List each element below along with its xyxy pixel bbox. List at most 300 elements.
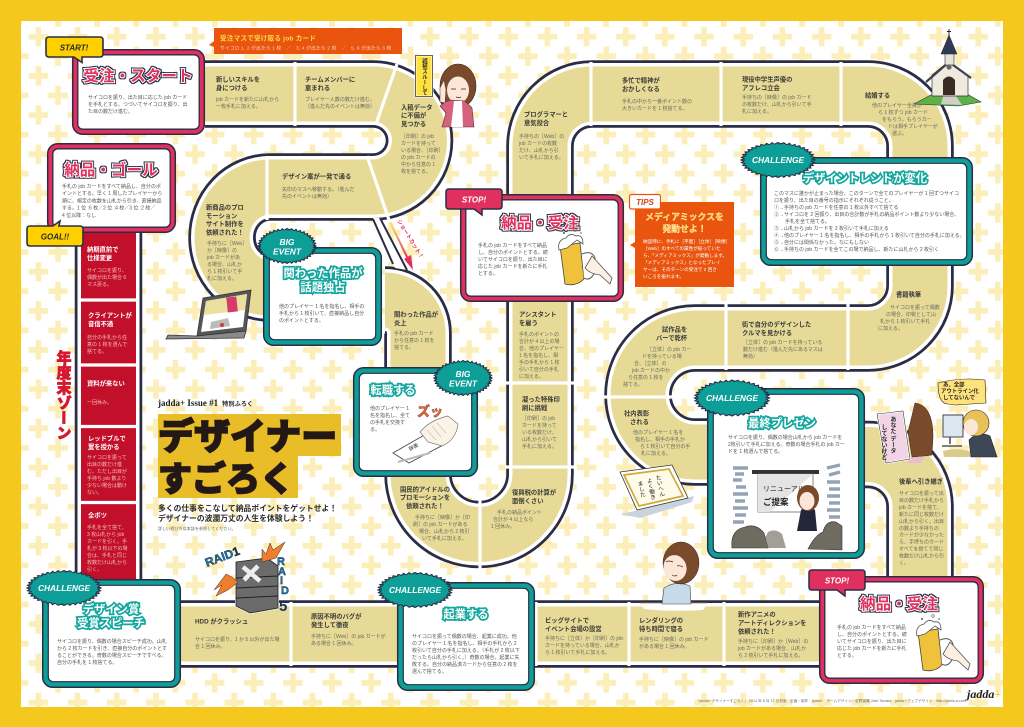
track cells: right row [623,290,944,566]
panel: job change: る。 [370,427,380,433]
panel: stop bottom: 手札の job カードをすべて納品 [837,625,906,631]
track cells: right row: 数だけ進む（進んだ先にあるマスは [743,346,823,353]
track cells: top row left: チームメンバーに [305,76,355,84]
track cells: top row left: 依頼された！ [206,227,244,236]
tips tag [630,194,660,209]
panel: start a business: 起業する [443,607,489,621]
track cells: middle column: 引いて自分の手札 [519,366,559,373]
title block [157,398,341,531]
panel: tips: メディアミックスを [645,212,724,222]
panel: design trend: ④→他のプレイヤー 1 名を指名し、相手の手札から 1 枚引いて自分の手札に加える。 [774,232,965,239]
red zone cells: 合は、手札と同じ [87,552,127,559]
track cells: right row: サイコロを振って出 [899,491,944,497]
panel: big event 1: 話題独占 [300,280,346,294]
red zone cells: 捨てる。 [87,348,107,355]
track cells: bottom row: 手持ちに［印刷］か［Web］の [738,639,808,645]
track cells: bottom row: サイコロを振り、1 か 5 以外が出た場 [195,637,280,643]
badge: challenge presentation: CHALLENGE [706,393,758,403]
track cells: right row: ら 1 枚引いて自分の手 [640,443,690,450]
panel: stop bottom: 応じた job カードを新たに手札 [837,645,906,652]
zone label: 年度末ゾーン [54,349,72,440]
track cells: middle column: 手の手札から 1 枚 [519,359,560,366]
badge: challenge trend [736,140,820,180]
track cells: top row left: モーション [206,212,237,220]
panel: design trend: ロを振り、出た目の番号の指示にそれぞれ従うこと。 [774,197,894,204]
track cells: bottom row: job カードがある場合、山札か [737,645,806,652]
track cells: bottom row [195,610,808,659]
track cells: bottom row: ら 1 枚引いて手札に加える。 [545,649,610,656]
panel: final presentation: 2枚引いて手札に加える。奇数の場合手札の job カー [728,441,845,448]
track cells: top row right: 現役中学生声優の [742,76,792,84]
track cells: top row left: 一枚手札に加える。 [216,103,261,110]
panel: tips: ヤーは、そのターンの受注で 2 回さ [643,266,717,273]
panel: start a business: サイコロを振って偶数の場合、起業に成功。他 [412,634,517,640]
track cells: bottom row: アートディレクションを [738,618,806,627]
panel: tips [630,202,734,287]
track cells: bottom row: 発生して徹夜 [311,620,349,629]
track cells: top row right: 他のプレイヤー全員か [872,103,922,109]
badge: big event 1: EVENT [273,246,302,256]
job card callout: サイコロ 1, 2 が出たら 1 枚 ／ 3, 4 が出たら 2 枚 ／ 5, 6 が出たら 3 枚 [220,44,392,52]
panel: start box: を手札とする。つづいてサイコロを振り、出 [88,101,188,108]
illustration: broken hard disk: RAID1 [203,544,242,570]
panel: stop center [461,195,623,301]
panel: goal box: 手札の job カードをすべて納品し、自分のポ [62,184,161,190]
illustration: resignation letter [393,404,458,463]
track cells: middle column: 合計が 4 以上の場 [519,338,560,345]
track cells: top row right [622,74,938,137]
track cells: right row: すべてを捨てて同じ [899,546,943,553]
track cells: bottom row: 手持ちに［Web］の job カードが [311,634,386,640]
panel: job change: 名を指名し、全て [370,412,410,419]
track cells: right row: 指名し、相手の手札か [635,436,685,443]
track cells: top row right: 結婚する [865,90,890,100]
track cells: middle column: 手持ちに［映像］か［印 [415,515,470,521]
panel: job change: 転職する [370,383,416,397]
panel: big event 1: 他のプレイヤー 1 名を指名し、相手の [279,304,364,310]
panel: goal box: する。1 位 :6 枚／2 位 :4 枚／3 位 :2 枚／ [62,205,155,212]
illustration: sleeping woman [640,542,707,611]
badge: challenge speech [22,568,106,608]
track cells: top row left: ら 1 枚引いて手 [207,268,242,275]
illustration: resignation letter: ズッ [417,404,443,419]
panel: final presentation [708,389,864,558]
board track [78,62,920,666]
panel: start a business: 敗する。自分の納品済カードから任意の 2 枚を [412,661,518,668]
track cells: middle column: 手札のポイントの [519,332,559,338]
red zone cells: 少ない場合は動け [87,482,127,489]
track cells: right row: job カードの中か [631,367,670,374]
track cells: middle column: 場合、山札から 2 枚引 [419,528,470,535]
shortcut arrow: ショートカット！ [395,218,425,260]
track cells: middle column: を雇う [519,318,538,327]
track cells: right row: ［立体］の job カードを持っている [743,340,822,346]
track cells: bottom row: 依頼された！ [738,626,776,636]
panel: start a business: 選んで捨てる。 [412,668,447,675]
illustration: beer mug [917,615,970,671]
stop tag bottom: STOP! [825,576,849,586]
panel: award speech [43,580,180,687]
track cells: right row: 枚数だけ山札から引 [899,553,944,560]
track cells: right row: 札から 1 枚引いて手札 [880,318,930,325]
track cells: bottom row: イベント会場の設営 [545,624,602,633]
track cells: right row: ［立体］の job カー [647,347,691,353]
job card callout [209,28,402,54]
track cells: right row: 山札から引く。出目 [899,518,944,525]
track cells: top row left: 札に加える。 [207,275,237,282]
panel: stop center: し、自分のポイントとする。続 [478,249,548,256]
track cells: right row: クルマを見かける [742,328,792,337]
track cells: middle column: だけ、山札から引 [519,147,559,154]
red zone cells: 自分の手札から任 [87,335,127,341]
track cells: top row left: 入稿データ [401,104,432,112]
badge: challenge business: CHALLENGE [389,585,441,595]
track cells: right row: ら、手持ちのカード [899,539,944,546]
red zone cells: 手札を全て捨て、 [87,525,127,531]
panel: design trend: このマスに誰かが止まった場合、このターンで全てのプレイヤーが 1 回ずつサイコ [774,191,959,197]
panel: big event 1: 手札から 1 枚引いて、直接納品し自分 [279,310,364,317]
badge: challenge trend: CHALLENGE [752,155,804,165]
panel: start box [73,50,204,134]
track cells: top row left: 身につける [216,83,247,92]
track cells: top row left: 新しいスキルを [216,76,260,84]
track cells: middle column: アシスタント [519,312,557,318]
panel: award speech: 受賞スピーチ [77,616,145,630]
track cells: top row right: 多忙で精神が [622,78,660,84]
track cells: right row: 目の数だけ手札から [899,497,944,504]
goal tag [27,221,83,246]
panel: start a business [398,583,534,690]
panel: tips: ら、「メディアミックス」が発動します。 [643,252,727,259]
panel: job change: 他のプレイヤー 1 [370,406,409,412]
illustration: beer mug [559,229,612,285]
track cells: middle column: 手札の納品ポイント [497,510,542,516]
track cells: right row: 捨てる。 [623,381,643,388]
red zone cells: 全ボツ [88,510,107,520]
illustration: woman with note: 誤植スルーして [421,58,428,96]
illustration: woman with note [416,56,476,127]
track cells: right row: job カードを捨て、 [898,504,942,511]
jadda logo: jadda+ [965,687,1001,701]
badge: challenge presentation [689,377,775,419]
track cells: top row left: いる場合、［印刷］ [401,147,444,154]
panel: final presentation: ドを 1 枚選んで捨てる。 [728,448,783,455]
badge: big event 2: EVENT [449,378,478,388]
track cells: middle column: いる枚数だけ、 [522,429,557,436]
panel: tips: いころを振れます。 [643,273,684,280]
track cells: middle column: 手札に加える。 [522,443,557,450]
track cells: middle column [394,110,568,542]
track cells: top row right: アフレコ立会 [742,83,780,92]
track cells: right row: 社内表彰 [624,410,649,418]
track cells: top row left: 新商品のプロ [206,204,244,212]
track cells: top row left: （進んだ先のイベントは無効） [305,103,375,110]
tips tag: TIPS [636,198,655,207]
panel: award speech: サイコロを振り、偶数の場合スピーチ成功。山札 [57,639,167,645]
red zone cells: 札が 3 枚以下の場 [87,545,128,552]
track cells: top row right: 大きいカードを 1 枚捨てる。 [622,105,688,112]
red zone cells: 枚数だけ山札から [87,559,127,566]
red zone cells: 音信不通 [88,319,114,328]
track cells: middle column: 関わった作品が [394,312,438,318]
track cells: top row left: か［映像］の [207,247,237,254]
panel: design trend: ⑤→自分には関係なかった。なにもしない [774,239,869,246]
red zone cells: 意の 1 枚を選んで [87,341,127,348]
track cells: middle column: 手持ちの［Web］の [519,134,564,140]
illustration: church [914,29,981,106]
panel: stop center: 納品・受注 [501,213,579,232]
illustration: coworkers with notes [877,379,997,463]
panel: award speech: ることができる。奇数の場合スピーチですべる。 [57,652,167,659]
panel: tips: ［Web］のすべての属性が揃っていた [643,245,721,252]
panel: tips: 納品時に、手札に［平面］［立体］［映像］ [643,239,730,244]
panel: start box: サイコロを振り、出た目に応じた job カード [88,95,187,101]
track cells: middle column: ［印刷］の job [522,416,555,422]
red zone cells: マス戻る。 [87,282,112,288]
stop tag center: STOP! [462,196,486,204]
track cells: middle column: 復興税の計算が [512,490,556,496]
track cells: bottom row: レンダリングの [639,618,683,624]
panel: tips: 発動せよ！ [662,223,707,234]
panel: stop bottom: し、自分のポイントとする。続 [837,631,907,638]
track cells: top row left [206,74,444,282]
track cells: bottom row: 原因不明のバグが [311,614,361,620]
track cells: middle column: 手札の job カード [394,331,433,337]
panel: stop bottom: 納品・受注 [860,594,938,613]
panel: stop bottom: いてサイコロを振り、出た目に [837,638,907,645]
track cells: top row left: に不備が [401,111,427,120]
track cells: right row: 後輩へ引き継ぎ [899,476,944,486]
start tag: START! [60,44,89,52]
track cells: top row left: プレイヤー人数の数だけ進む。 [305,97,375,103]
panel: design trend [761,158,972,265]
track cells: middle column: に加える。 [519,373,544,380]
track cells: top row right: ドは相手プレイヤーが [888,123,938,130]
track cells: right row: 合、［立体］の [634,360,667,367]
panel: design trend: デザイントレンドが変化 [803,171,928,185]
track cells: middle column: 捨てる。 [394,344,414,351]
track cells: top row left: ［印刷］の job [401,134,434,140]
track cells: top row left: 中から任意の 1 [401,161,435,168]
track cells: middle column: プログラマーと [524,112,568,118]
title block: jadda+ Issue #1 特別ふろく [157,398,253,408]
track cells: middle column: 合計が 4 以上なら [493,516,534,523]
red zone cells: カードを引く。手 [87,538,127,545]
track cells: middle column: 炎上 [394,318,407,327]
track cells: top row right: おかしくなる [622,84,660,93]
track cells: bottom row: 新作アニメの [738,612,776,618]
panel: stop bottom: とする。 [837,653,857,659]
track cells: top row left: サイト制作を [206,219,244,228]
panel: design trend: ⑥→手持ちの job カードを全てこの場で納品し、新たに山札から 2 枚引く [774,246,939,253]
panel: tips: 「メディアミックス」となったプレイ [643,259,720,266]
track cells: top row left: job カードを新たに山札から [216,97,279,103]
panel: final presentation: サイコロを振り、偶数の場合山札から job カードを [728,435,842,441]
track cells: bottom row: ビッグサイトで [545,618,589,624]
illustration: broken hard disk: RAID [277,556,289,597]
panel: stop center: いてサイコロを振り、出た目に [478,256,548,263]
panel: stop center: とする。 [478,271,498,277]
track cells: top row right: の枚数だけ、山札から引いて手 [742,101,812,108]
shortcut arrow [390,218,425,270]
red zone cells: 資料が来ない [87,378,125,388]
badge: big event 1 [254,226,320,266]
track cells: right row: ら任意の 1 枚を [628,374,664,381]
track cells: middle column: いて手札に加える。 [519,154,564,161]
track cells: right row: バーで乾杯 [656,333,688,342]
badge: challenge business [373,570,457,610]
track cells: top row left: job カードがあ [206,254,240,261]
illustration: certificate: たいへん [654,474,665,498]
track cells: bottom row: 待ち時間で寝る [639,624,683,633]
panel: design trend: 手札を全て捨てる。 [785,218,830,225]
red zone cells: 納期直前で [87,246,118,254]
panel: design trend: ③→山札から job カードを 2 枚引いて手札に加える [774,225,889,232]
track cells: middle column: 刷に挑戦 [522,403,548,412]
track cells: right row: 街で自分のデザインした [742,322,811,328]
panel: big event 1 [264,248,381,345]
track cells: right row: ドを持っている場 [642,353,682,360]
red zone cells: 翼を授かる [88,442,119,451]
track cells: middle column: 国民的アイドルの [400,486,450,494]
track cells: bottom row: 手持ちに［立体］か［印刷］の job [545,636,623,642]
track cells: middle column: job カードの枚数 [518,140,557,147]
panel: goal box: イントとする。早く 1 周したプレイヤーから [62,190,162,197]
title block: デザイナー [158,416,337,457]
panel: stop center: 応じた job カードを新たに手札 [478,263,547,270]
track cells: middle column: 合、他のプレイヤー [519,345,564,352]
red zone cells: サイコロを振り、 [87,268,127,274]
title block: デザイナーの波瀾万丈の人生を体験しよう！ [158,513,314,523]
panel: big event 1: 関わった作品が [283,268,363,280]
track cells: middle column: 刷］の job カードがある [413,521,467,528]
track cells: right row: 試作品を [662,326,687,334]
track cells: right row: に加える。 [878,325,903,332]
shortcut channel [373,218,407,270]
panel: goal box: 納品・ゴール [64,160,158,179]
red zone cells: む。ただし出目が [87,468,127,475]
track cells: top row left: 手持ちに［Web］ [207,241,247,247]
track cells: bottom row: HDD がクラッシュ [195,616,248,626]
track cells: right row: カードが少なかった [899,532,944,539]
badge: big event 2 [430,358,496,398]
panel: job change: の手札を交換す [370,419,405,426]
track cells: bottom row: 合 1 回休み。 [195,643,226,650]
panel: start a business: 枚引いて自分の手札に加える。（手札が 2 枚以下 [412,647,520,654]
illustration: presentation scene: リニューアル [763,485,805,493]
track cells: top row left: 矢印のマスへ移動する。（進んだ [282,187,355,193]
illustration: coworkers with notes: してないけど [880,424,887,460]
illustration: certificate [620,465,694,518]
red zone cells: 引く。 [87,566,102,573]
red zone cells: 3 枚山札から job [87,531,124,538]
panel: final presentation: 最終プレゼン [748,416,816,430]
red zone cells: レッドブルで [88,436,126,442]
track cells: right row: 書籍執筆 [896,290,922,298]
red zone cells: サイコロを振って [87,455,127,461]
track cells: right row: される [630,417,649,426]
start tag [46,37,103,62]
illustration: presentation scene [732,465,842,550]
track cells: middle column: 山札から引いて [522,436,557,443]
badge: big event 2: BIG [456,369,470,379]
panel: start box: た目の数だけ進む。 [88,108,133,115]
track cells: middle column: カードを持って [522,422,557,429]
track cells: bottom row: ある場合 1 回休み。 [311,640,357,647]
panel: award speech: から 2 枚カードを引き、直接自分のポイントとす [57,645,167,652]
track cells: right row: 札に加える。 [641,450,671,457]
track cells: right row: く。 [899,560,909,566]
red zone cells: 出目の数だけ進 [87,461,122,468]
red zone cells: 一回休み。 [87,399,112,406]
badge: challenge speech: CHALLENGE [38,583,90,593]
panel: award speech: 自分の手札を 1 枚捨てる。 [57,659,118,666]
track cells: middle column: から任意の 1 枚を [394,337,435,344]
track cells: top row right: 手札の中から一番ポイント数の [622,99,692,105]
track cells: middle column: 面倒くさい [512,496,543,505]
panel: goal box: 順に、規定の枚数を山札から引き、直接納品 [62,197,162,204]
track cells: right row: の場合、印税として山 [886,311,936,318]
track cells: top row right: をもらう。もらうカー [882,116,932,123]
illustration: coworkers with notes: アウトライン化 [941,387,979,395]
panel: award speech: デザイン賞 [83,604,139,616]
goal tag: GOAL!! [41,232,70,242]
stop tag center [446,189,502,215]
track cells: middle column: 1 回休み。 [491,523,515,530]
track cells: right row: サイコロを振って偶数 [890,305,940,311]
red zone cells: 偶数が出た場合 6 [87,274,126,281]
panel: start a business: のプレイヤー 1 名を指名し、相手の手札から 2 [412,640,517,647]
track cells: bottom row: がある場合 1 回休み。 [639,643,690,650]
track cells: bottom row: カードを持っている場合、山札か [545,642,620,649]
track cells: top row left: 恵まれる [305,83,330,92]
footer credits: 『jadda+ デザイナーすごろく』 2014 年 8 月 17 日初版 企画・制作：jadda+ チームデザイン：佐野香織 Joke Tanaka jadda+ ウェブデザイン http://jadda-a.com [696,698,966,703]
track cells: right row: 新たに同じ枚数だけ [899,511,944,518]
track cells: top row right: 手持ちの［映像］の job カード [742,95,811,101]
panel: job change [354,368,477,476]
panel: design trend: ②→サイコロを 2 回振り、出目の合計数が手札の納品ポイント数より少ない場合、 [774,211,959,218]
track cells: top row left: デザイン案が一発で通る [282,172,351,180]
illustration: coworkers with notes: してないんで [943,394,976,402]
stop tag bottom [809,570,865,596]
red zone cells: 仕様変更 [87,253,113,262]
track cells: middle column: 意気投合 [524,118,550,127]
red zone cells: クライアントが [88,312,132,320]
panel: start box: 受注・スタート [83,66,193,85]
illustration: certificate: よく働き [645,477,656,501]
track cells: top row left: る場合、山札か [207,261,242,268]
illustration: presentation scene: ご提案 [763,497,789,507]
track cells: bottom row: ら 2 枚引いて手札に加える。 [738,652,803,659]
illustration: laptop [166,290,251,339]
job card callout: 受注マスで受け取る job カード [220,34,316,42]
red zone cells: ない。 [87,489,102,496]
track cells: middle column: いて手札に加える。 [422,535,467,542]
panel: start a business: だったら山札から引く。）奇数の場合、起業に失 [412,654,520,661]
illustration: broken hard disk: 5 [279,598,287,615]
track cells: top row left: 見つかる [401,120,426,128]
illustration: certificate: ました [636,480,646,498]
panel: stop center: 手札の job カードをすべて納品 [478,243,547,249]
panel: design trend: ①→手持ちの job カードを任意の 1 枚以外すべて捨てる [774,204,898,211]
track cells: middle column: プロモーションを [400,494,450,502]
panel: goal box: 4 位以降：なし [62,212,96,219]
illustration: coworkers with notes: あ、全部 [943,382,965,388]
track cells: right row: の数より手持ちの [899,525,939,532]
red zone cells: 手持ち job 数より [87,475,126,482]
track cells: top row left: 枚を捨てる。 [401,168,431,175]
illustration: broken hard disk [203,542,289,615]
